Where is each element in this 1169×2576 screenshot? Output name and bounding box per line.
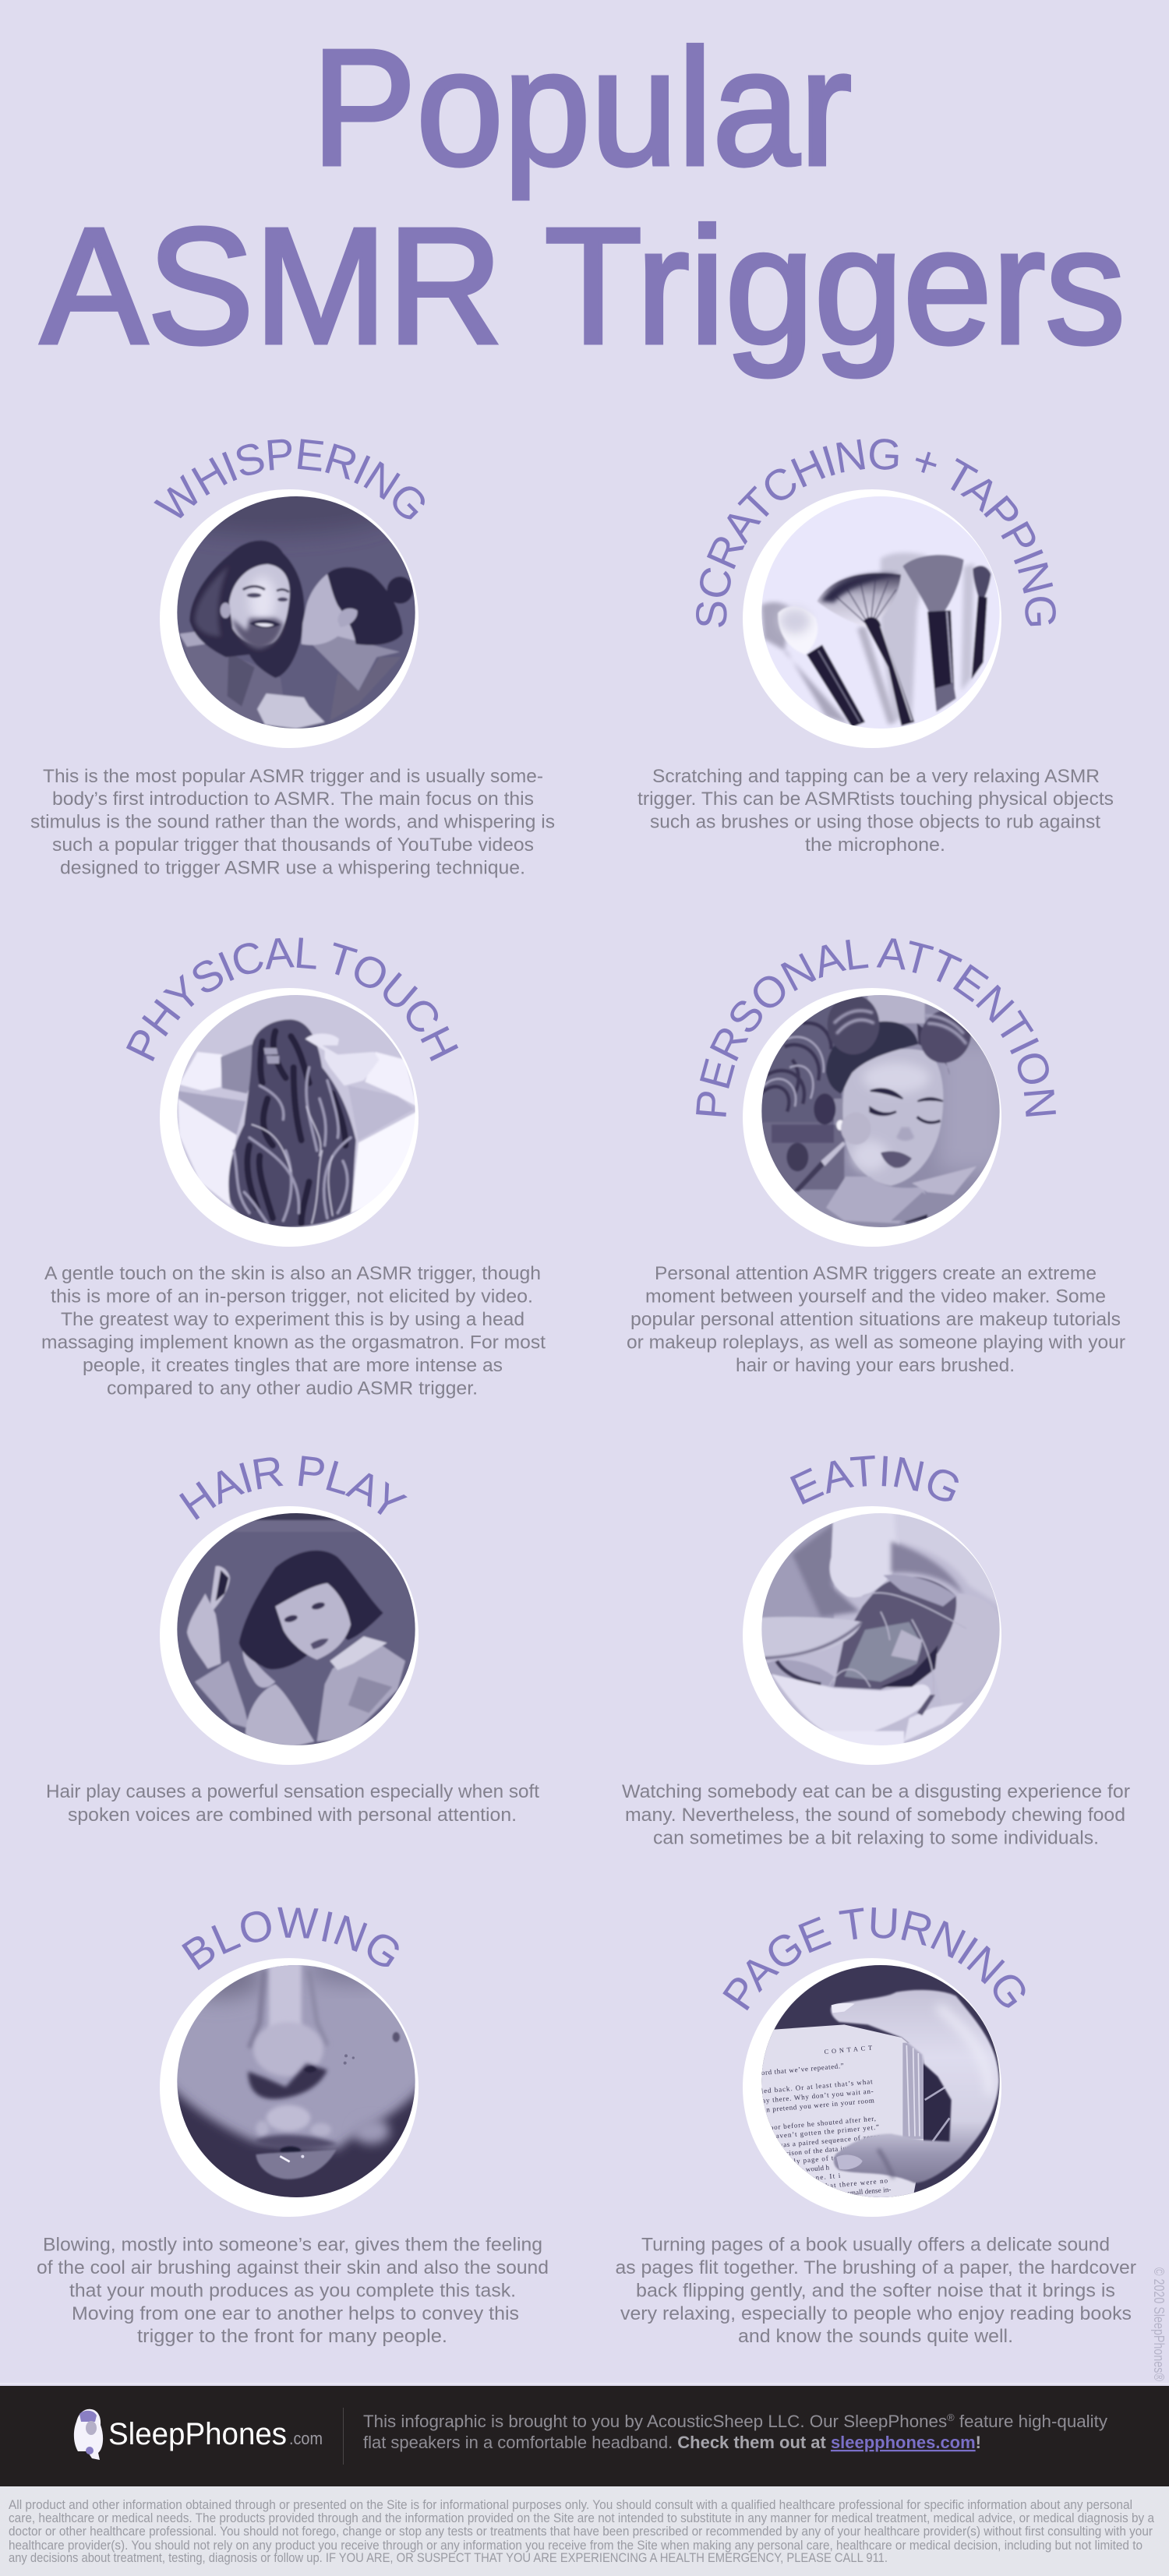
description: eating: can sometimes be a bit relaxing to some individuals. (653, 1828, 1099, 1848)
photo: hand holding open book: arly page of tex (786, 2153, 842, 2165)
photo: hand holding open book: CONTACT (824, 2045, 873, 2056)
description: page turning: Turning pages of a book usually offers a delicate sound (641, 2235, 1110, 2255)
sponsor message: ® (947, 2412, 955, 2423)
description: whispering (30, 766, 555, 879)
description: whispering: This is the most popular ASMR trigger and is usually some- (43, 766, 543, 787)
footer band (0, 2383, 1169, 2486)
heading: scratching and tapping: SCRATCHING + TAPPING (696, 439, 1056, 627)
disclaimer (0, 2486, 1169, 2576)
description: eating: many. Nevertheless, the sound of somebody chewing food (625, 1805, 1125, 1826)
white circle: personal attention (743, 988, 1001, 1247)
description: whispering: body’s first introduction to ASMR. The main focus on this (52, 789, 534, 810)
logo: SleepPhones sheep (74, 2409, 287, 2460)
photo: woman with makeup brush (761, 995, 1000, 1227)
photo: man and woman whispering (177, 496, 415, 729)
title: Popular (312, 15, 852, 199)
panel: blowing (37, 1907, 549, 2347)
panel: eating (622, 1456, 1130, 1848)
photo: hands in long hair (177, 995, 415, 1227)
description: eating: Watching somebody eat can be a disgusting experience for (622, 1781, 1130, 1802)
description: physical touch: A gentle touch on the skin is also an ASMR trigger, though (44, 1263, 541, 1284)
heading: blowing: BLOWING (182, 1907, 399, 1970)
sponsor message: flat speakers in a comfortable headband. Check them out at sleepphones.com! (363, 2433, 981, 2452)
heading: whispering: WHISPERING (154, 439, 425, 519)
logo wordmark: SleepPhones (108, 2417, 287, 2451)
description: personal attention: hair or having your ears brushed. (736, 1355, 1015, 1376)
description: blowing: that your mouth produces as you complete this task. (69, 2280, 516, 2302)
description: scratching and tapping: Scratching and tapping can be a very relaxing ASMR (652, 766, 1100, 787)
heading: personal attention: PERSONAL ATTENTION (696, 938, 1056, 1117)
description: physical touch (41, 1263, 546, 1399)
description: scratching and tapping: the microphone. (805, 835, 945, 856)
description: page turning: and know the sounds quite well. (738, 2326, 1013, 2347)
panel: page turning (616, 1907, 1136, 2347)
white circle: page turning (743, 1958, 1001, 2217)
description: physical touch: this is more of an in-person trigger, not elicited by video. (51, 1286, 533, 1307)
photo: hand holding open book: door before he shouted after her, (765, 2115, 876, 2132)
photo: hand holding open book: me small dense in- (836, 2186, 892, 2198)
heading: physical touch: PHYSICAL TOUCH (126, 937, 458, 1061)
description: eating (622, 1781, 1130, 1848)
divider (343, 2408, 344, 2465)
description: hair play: spoken voices are combined with personal attention. (68, 1805, 517, 1826)
description: blowing: Blowing, mostly into someone’s ear, gives them the feeling (43, 2235, 542, 2255)
photo: hand holding open book: rison of the data just be (786, 2143, 862, 2157)
description: scratching and tapping (637, 766, 1114, 856)
photo: woman with bob and hairbrush (177, 1513, 415, 1745)
white circle: physical touch (160, 988, 419, 1247)
photo: hand holding open book: hat there were no (825, 2176, 888, 2190)
description: personal attention: moment between yourself and the video maker. Some (645, 1286, 1106, 1307)
description: whispering: designed to trigger ASMR use a whispering technique. (60, 857, 525, 879)
sponsor message: This infographic is brought to you by AcousticSheep LLC. Our SleepPhones (363, 2412, 951, 2431)
photo: hand holding open book: word that we’ve repeated.” (755, 2062, 844, 2077)
description: scratching and tapping: such as brushes or using those objects to rub against (650, 812, 1100, 832)
photo: nose and pursed lips (177, 1965, 415, 2197)
heading: hair play: HAIR PLAY (179, 1456, 408, 1519)
panel: hair play (46, 1456, 539, 1826)
heading: page turning: PAGE TURNING (722, 1907, 1026, 2010)
description: physical touch: The greatest way to experiment this is by using a head (61, 1309, 524, 1330)
title (41, 15, 1125, 378)
photo: hand holding open book: cled back. Or at least that’s what (757, 2077, 873, 2095)
panel: personal attention (627, 938, 1125, 1376)
white circle: hair play (160, 1506, 419, 1765)
title: ASMR Triggers (41, 193, 1125, 378)
description: physical touch: massaging implement known as the orgasmatron. For most (41, 1332, 546, 1353)
description: hair play: Hair play causes a powerful sensation especially when soft (46, 1781, 539, 1802)
photo: hand holding open book: vay there. Why don’t you wait an- (758, 2087, 874, 2105)
panel: physical touch (41, 937, 546, 1399)
logo suffix: .com (289, 2429, 323, 2448)
description: whispering: such a popular trigger that thousands of YouTube videos (52, 835, 534, 856)
sponsor message (363, 2412, 1108, 2452)
white circle: eating (743, 1506, 1001, 1765)
photo: hand holding open book: haven’t gotten the primer yet.” (772, 2123, 879, 2140)
description: personal attention: Personal attention ASMR triggers create an extreme (655, 1263, 1097, 1284)
photo: hand holding open book: was a paired sequence of zeros (777, 2133, 881, 2149)
description: blowing: trigger to the front for many people. (137, 2326, 447, 2347)
description: physical touch: people, it creates tingles that are more intense as (83, 1355, 503, 1376)
photo: makeup brushes (761, 496, 999, 729)
description: personal attention (627, 1263, 1125, 1376)
description: page turning: very relaxing, especially to people who enjoy reading books (620, 2303, 1132, 2324)
description: physical touch: compared to any other audio ASMR trigger. (107, 1378, 478, 1399)
photo: mouth eating food (761, 1513, 1000, 1745)
description: personal attention: popular personal attention situations are makeup tutorials (630, 1309, 1121, 1330)
description: blowing (37, 2235, 549, 2347)
description: hair play (46, 1781, 539, 1826)
photo: hand holding open book: sm would h (795, 2163, 830, 2174)
panel: whispering (30, 439, 555, 879)
description: scratching and tapping: trigger. This can be ASMRtists touching physical objects (637, 789, 1114, 810)
copyright note: © 2020 SleepPhones® (1151, 2267, 1167, 2381)
disclaimer: any decisions about treatment, testing, diagnosis or follow up. IF YOU ARE, OR SUSPECT THAT YOU ARE EXPERIENCING A HEALTH EMERGENCY, PLEASE CALL 911. (9, 2551, 888, 2565)
description: blowing: Moving from one ear to another helps to convey this (72, 2303, 519, 2324)
white circle: blowing (160, 1958, 419, 2217)
description: blowing: of the cool air brushing against their skin and also the sound (37, 2257, 549, 2278)
white circle: scratching (743, 489, 1001, 748)
photo: hand holding open book: can pretend you were in your room (758, 2096, 874, 2114)
panel: scratching and tapping (637, 439, 1114, 856)
description: personal attention: or makeup roleplays, as well as someone playing with your (627, 1332, 1125, 1353)
description: whispering: stimulus is the sound rather than the words, and whispering is (30, 812, 555, 832)
description: page turning: back flipping gently, and the softer noise that it brings is (636, 2280, 1115, 2302)
description: page turning: as pages flit together. The brushing of a paper, the hardcover (616, 2257, 1136, 2278)
photo: hand holding open book: none. It i (807, 2172, 841, 2183)
photo: hand holding open book (761, 1965, 1000, 2197)
white circle: whispering (160, 489, 419, 748)
sponsor message: feature high-quality (955, 2412, 1108, 2431)
heading: eating: EATING (790, 1456, 959, 1505)
description: page turning (616, 2235, 1136, 2347)
